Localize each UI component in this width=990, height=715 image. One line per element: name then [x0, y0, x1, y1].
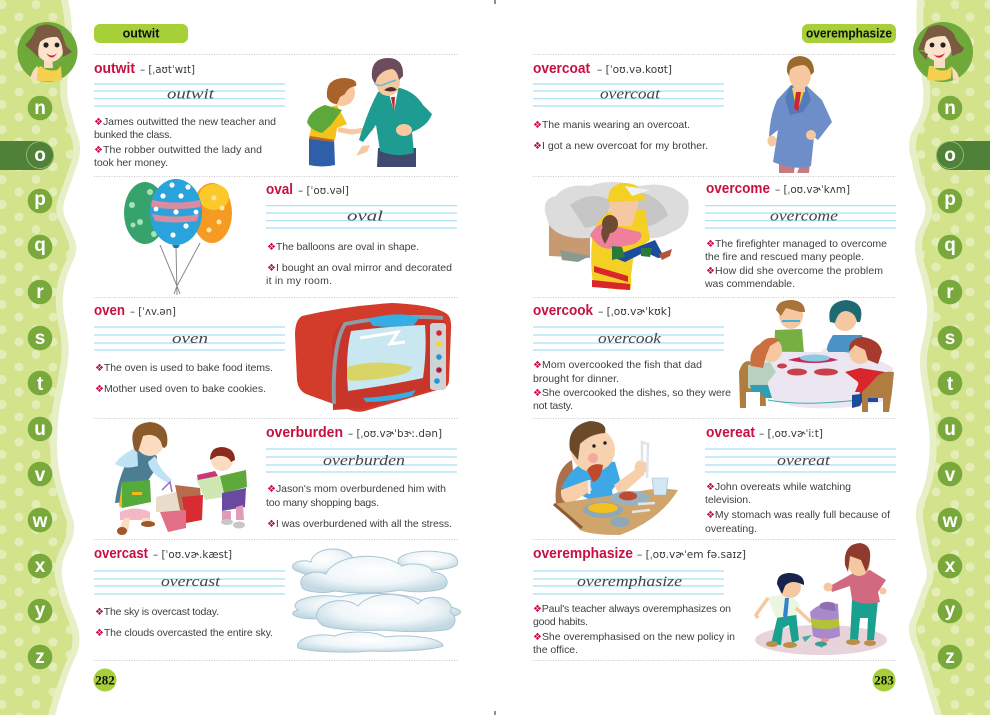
- letter tabs: n: [944, 98, 956, 119]
- left sidebar: [0, 0, 80, 715]
- entry: oven: ❖Mother used oven to bake cookies.: [95, 383, 266, 395]
- entry: overcome: was commendable.: [704, 278, 795, 290]
- entry: overemphasize: ❖Paul's teacher always overemphasizes on: [533, 603, 731, 615]
- entry: oven: oven: [94, 302, 125, 319]
- entry: overburden: ❖Jason's mom overburdened him with: [267, 483, 446, 495]
- letter tabs: o: [34, 145, 46, 166]
- entry: overcoat: ❖I got a new overcoat for my brother.: [533, 140, 708, 152]
- letter tabs: v: [945, 465, 956, 486]
- entry: overcook: ❖She overcooked the dishes, so they were: [533, 387, 731, 399]
- letter tabs: v: [35, 465, 46, 486]
- entry: overemphasize: ❖She overemphasised on the new policy in: [533, 631, 735, 643]
- entry: oven: [94, 302, 285, 395]
- letter tabs: y: [945, 600, 956, 621]
- entry: overemphasize: [533, 545, 746, 656]
- header tab: outwit: [94, 24, 188, 43]
- entry: overcook: not tasty.: [533, 400, 573, 412]
- entry: oval: ❖I bought an oval mirror and decorated: [267, 262, 452, 274]
- entry: outwit: ❖The robber outwitted the lady and: [94, 144, 262, 156]
- entry: overcoat: ❖The manis wearing an overcoat.: [533, 119, 690, 131]
- selected letter band: [936, 141, 990, 170]
- entry: outwit: ❖James outwitted the new teacher and: [94, 116, 276, 128]
- entry: overcome: the fire and rescued many people.: [705, 251, 864, 263]
- entry: oval: oval: [266, 181, 293, 198]
- entry: overburden: [266, 424, 457, 530]
- entry: overburden: – [ˌoʊ.vɚˈbɝː.dən]: [348, 427, 442, 440]
- entry: outwit: took her money.: [94, 157, 168, 169]
- entry: overcoat: [533, 60, 724, 152]
- entry: overcome: ❖The firefighter managed to overcome: [706, 238, 887, 250]
- entry: overburden: overburden: [323, 453, 405, 469]
- avatar: girl: [18, 22, 78, 82]
- entry: overemphasize: – [ˌoʊ.vɚˈem fə.saɪz]: [637, 548, 746, 561]
- entry: overburden: too many shopping bags.: [266, 497, 379, 509]
- entry: overeat: television.: [705, 494, 751, 506]
- entry: oval: – [ˈoʊ.vəl]: [298, 184, 349, 197]
- letter tabs: w: [32, 511, 48, 532]
- letter tabs: w: [942, 511, 958, 532]
- entry: overcast: [94, 545, 285, 639]
- header tab: overemphasize: overemphasize: [806, 26, 892, 40]
- entry: overcoat: overcoat: [600, 87, 661, 103]
- illustration: firefighter rescuing a girl: [545, 182, 689, 290]
- entry: overcast: – [ˈoʊ.vɚ.kæst]: [153, 548, 232, 561]
- illustration: family at dinner table: [739, 300, 894, 412]
- letter tabs: s: [35, 328, 45, 349]
- letter tabs: x: [35, 556, 46, 577]
- illustration: shopping mother and son: [115, 422, 247, 535]
- entry: overemphasize: overemphasize: [577, 574, 682, 590]
- letter tabs: [26, 96, 54, 669]
- letter tabs: s: [945, 328, 955, 349]
- letter tabs: t: [37, 374, 44, 395]
- illustration: boy overeating at table: [554, 421, 678, 535]
- entry: outwit: outwit: [94, 60, 135, 77]
- letter tabs: z: [945, 647, 955, 668]
- entry: overcome: ❖How did she overcome the problem: [706, 265, 883, 277]
- page number 283: 283: [874, 672, 894, 688]
- letter tabs: n: [34, 98, 46, 119]
- letter tabs: t: [947, 374, 954, 395]
- entry: overcast: ❖The sky is overcast today.: [95, 606, 219, 618]
- page number 283: [872, 668, 896, 692]
- entry: overcook: – [ˌoʊ.vɚˈkʊk]: [598, 305, 671, 318]
- entry: outwit: bunked the class.: [94, 129, 172, 141]
- entry: overeat: overeating.: [705, 523, 757, 535]
- letter tabs: [936, 96, 964, 669]
- entry: overcook: overcook: [598, 331, 661, 347]
- entry: oval: oval: [347, 209, 383, 225]
- entry: oval: ❖The balloons are oval in shape.: [267, 241, 419, 253]
- entry: overemphasize: the office.: [533, 644, 578, 656]
- letter tabs: q: [34, 235, 46, 256]
- header tab: outwit: outwit: [123, 26, 160, 40]
- letter tabs: u: [944, 419, 956, 440]
- entry: overcome: overcome: [770, 209, 838, 225]
- entry: overcook: ❖Mom overcooked the fish that dad: [533, 359, 702, 371]
- letter tabs: u: [34, 419, 46, 440]
- illustration: balloons: [124, 179, 232, 295]
- illustration: clouds: [293, 549, 461, 652]
- entry: oval: it in my room.: [266, 275, 332, 287]
- entry: oven: – [ˈʌv.ən]: [130, 305, 176, 318]
- entry: overeat: – [ˌoʊ.vɚˈiːt]: [759, 427, 823, 440]
- entry: outwit: outwit: [167, 87, 215, 103]
- entry: overcook: overcook: [533, 302, 594, 319]
- letter tabs: r: [36, 282, 44, 303]
- letter tabs: o: [944, 145, 956, 166]
- entry: overemphasize: good habits.: [533, 616, 588, 628]
- page number 282: 282: [95, 672, 115, 688]
- illustration: teacher scolding boy: [755, 543, 887, 655]
- entry: overcoat: – [ˈoʊ.və.koʊt]: [597, 63, 672, 76]
- entry: oven: oven: [172, 331, 208, 347]
- letter tabs: p: [944, 189, 956, 210]
- entry: oval: [266, 181, 457, 287]
- letter tabs: y: [35, 600, 46, 621]
- illustration: man in overcoat: [768, 56, 832, 173]
- entry: overeat: [705, 424, 896, 535]
- right sidebar: [909, 0, 990, 715]
- entry: oven: ❖The oven is used to bake food items.: [95, 362, 273, 374]
- entry: overemphasize: overemphasize: [533, 545, 633, 562]
- entry: overcast: overcast: [94, 545, 148, 562]
- entry: overeat: overeat: [706, 424, 755, 441]
- entry: outwit: [94, 60, 285, 169]
- selected letter band: [0, 141, 54, 170]
- entry: overcome: – [ˌoʊ.vɚˈkʌm]: [775, 183, 850, 196]
- entry: overcoat: overcoat: [533, 60, 590, 77]
- letter tabs: x: [945, 556, 956, 577]
- illustration: oven: [295, 303, 451, 412]
- entry: overcome: [704, 180, 896, 290]
- entry: overeat: ❖My stomach was really full because of: [706, 509, 890, 521]
- entry: overcast: ❖The clouds overcasted the entire sky.: [95, 627, 273, 639]
- illustration: boy and teacher: [307, 58, 432, 167]
- page number 282: [94, 668, 116, 692]
- entry: overcast: overcast: [161, 574, 221, 590]
- avatar: girl: [913, 22, 973, 82]
- letter tabs: z: [35, 647, 45, 668]
- entry: overeat: ❖John overeats while watching: [706, 481, 851, 493]
- entry: overcome: overcome: [706, 180, 770, 197]
- letter tabs: q: [944, 235, 956, 256]
- letter tabs: p: [34, 189, 46, 210]
- entry: outwit: – [ˌaʊtˈwɪt]: [140, 63, 195, 76]
- entry: overcook: [533, 302, 731, 412]
- entry: overburden: ❖I was overburdened with all the stress.: [267, 518, 452, 530]
- entry: overcook: brought for dinner.: [533, 373, 619, 385]
- letter tabs: r: [946, 282, 954, 303]
- entry: overeat: overeat: [777, 453, 831, 469]
- entry: overburden: overburden: [266, 424, 343, 441]
